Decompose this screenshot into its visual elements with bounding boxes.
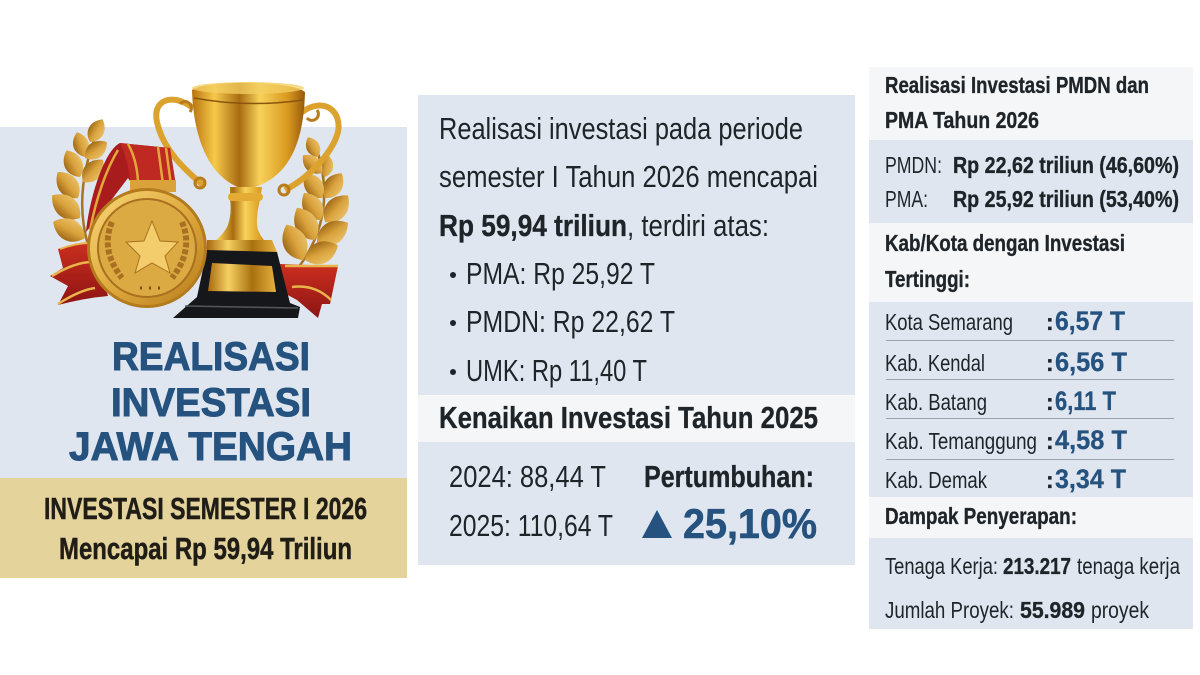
- row: Kab. Temanggung: :: [1046, 428, 1054, 454]
- row: Kab. Kendal: 6,56 T: [1055, 347, 1127, 377]
- panel: middle realization details: [418, 95, 855, 565]
- list: investment breakdown: PMDN: Rp 22,62 T: [466, 304, 675, 339]
- row: Kab. Demak: :: [1046, 467, 1054, 493]
- text block: yearly values: [449, 459, 613, 543]
- list: investment breakdown: UMK: Rp 11,40 T: [466, 353, 647, 388]
- panel: gold summary band: INVESTASI SEMESTER I 2026: [44, 491, 367, 526]
- heading: PMDN and PMA: PMA Tahun 2026: [885, 107, 1039, 133]
- row: Kota Semarang: :: [1046, 309, 1054, 335]
- text block: realization intro: , terdiri atas:: [627, 208, 769, 243]
- heading: main title: INVESTASI: [111, 381, 311, 425]
- row: Kab. Temanggung: [885, 425, 1127, 455]
- row: Kab. Batang: Kab. Batang: [885, 389, 987, 415]
- row: Kab. Kendal: Kab. Kendal: [885, 350, 985, 376]
- row: Kota Semarang: 6,57 T: [1055, 306, 1125, 336]
- heading: main title: REALISASI: [112, 335, 310, 379]
- heading: top regencies: [869, 223, 1193, 302]
- heading: main title: [69, 335, 352, 469]
- heading: 2025 investment increase: [418, 395, 855, 442]
- heading: PMDN and PMA: [869, 67, 1193, 140]
- text block: workforce and projects: Jumlah Proyek:: [885, 597, 1014, 623]
- text block: PMDN and PMA values: [885, 152, 1179, 212]
- heading: 2025 investment increase: Kenaikan Investasi Tahun 2025: [439, 400, 818, 435]
- heading: absorption impact: [869, 497, 1193, 538]
- row: Kota Semarang: [885, 306, 1125, 336]
- icon: right laurel wreath: [276, 134, 356, 270]
- icon: lower left ribbon: [50, 242, 108, 305]
- text block: workforce and projects: tenaga kerja: [1077, 553, 1180, 579]
- illustration: trophy and medal: [45, 82, 356, 318]
- callout: growth percentage: 25,10%: [683, 500, 817, 547]
- text block: yearly values: 2025: 110,64 T: [449, 508, 613, 543]
- heading: main title: JAWA TENGAH: [69, 425, 352, 469]
- row: Kab. Kendal: :: [1046, 350, 1054, 376]
- icon: gold medal with star: [87, 188, 207, 308]
- text block: workforce and projects: Tenaga Kerja:: [885, 553, 998, 579]
- callout: growth percentage: Pertumbuhan:: [644, 459, 814, 494]
- row: Kab. Demak: 3,34 T: [1055, 464, 1126, 494]
- row: Kab. Temanggung: 4,58 T: [1055, 425, 1127, 455]
- icon: left laurel wreath: [45, 115, 112, 248]
- text block: workforce and projects: [885, 553, 1180, 623]
- list: investment breakdown: PMA: Rp 25,92 T: [466, 256, 655, 291]
- panel: right details: [869, 67, 1193, 629]
- callout: growth percentage: [642, 459, 817, 547]
- icon: lower right ribbon: [280, 264, 338, 318]
- text block: realization intro: [439, 111, 818, 243]
- text block: workforce and projects: 55.989: [1020, 597, 1085, 623]
- panel: gold summary band: [0, 478, 407, 578]
- icon: trophy: [156, 82, 339, 318]
- text block: realization intro: Rp 59,94 triliun: [439, 208, 627, 243]
- row: Kab. Batang: 6,11 T: [1055, 386, 1116, 416]
- panel: left title background: [0, 127, 407, 478]
- text block: realization intro: semester I Tahun 2026 mencapai: [439, 159, 818, 194]
- heading: top regencies: Kab/Kota dengan Investasi: [885, 230, 1125, 256]
- row: Kab. Demak: Kab. Demak: [885, 467, 987, 493]
- table: regency investment ranking: [885, 306, 1174, 494]
- row: Kab. Batang: [885, 386, 1116, 416]
- text block: yearly values: 2024: 88,44 T: [449, 459, 606, 494]
- heading: absorption impact: Dampak Penyerapan:: [885, 503, 1077, 529]
- row: Kab. Batang: :: [1046, 389, 1054, 415]
- text block: workforce and projects: 213.217: [1003, 553, 1071, 579]
- list: investment breakdown: [450, 256, 675, 388]
- row: Kab. Temanggung: Kab. Temanggung: [885, 428, 1037, 454]
- text block: PMDN and PMA values: PMA:: [885, 186, 928, 212]
- heading: top regencies: Tertinggi:: [885, 266, 970, 292]
- text block: workforce and projects: proyek: [1091, 597, 1149, 623]
- row: Kab. Demak: [885, 464, 1126, 494]
- row: Kota Semarang: Kota Semarang: [885, 309, 1013, 335]
- row: Kab. Kendal: [885, 347, 1127, 377]
- text block: realization intro: Realisasi investasi pada periode: [439, 111, 803, 146]
- panel: gold summary band: Mencapai Rp 59,94 Triliun: [59, 531, 352, 566]
- icon: medal ribbon: [86, 143, 176, 232]
- text block: PMDN and PMA values: PMDN:: [885, 152, 942, 178]
